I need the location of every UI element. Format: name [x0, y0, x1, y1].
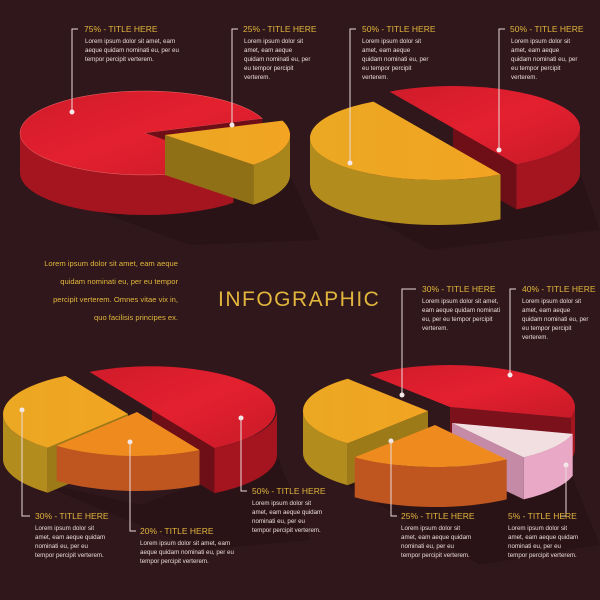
- callout: 40%: Lorem ipsum dolor sit: [522, 298, 581, 305]
- callout: 5%: nominati eu, per eu: [508, 543, 562, 550]
- callout: 40%: verterem.: [522, 334, 548, 341]
- callout: 25% bottom-right: Lorem ipsum dolor sit: [401, 525, 460, 532]
- callout: 25%: 25% - TITLE HERE: [243, 24, 317, 34]
- callout: 50% left: amet, eam aeque: [362, 47, 411, 54]
- callout: 75%: 75% - TITLE HERE: [84, 24, 158, 34]
- callout: 30% bottom-left: 30% - TITLE HERE: [35, 511, 109, 521]
- callout: 50% right: Lorem ipsum dolor sit: [511, 38, 570, 45]
- callout: 75%: Lorem ipsum dolor sit amet, eam: [85, 38, 175, 45]
- callout: 50% bottom-left: amet, eam aeque quidam: [252, 509, 322, 516]
- chart: bottom-left pie 30/20/50: [3, 366, 310, 550]
- chart: top-right pie 50/50: [310, 86, 600, 250]
- callout: 30% bottom-right: [400, 284, 500, 398]
- callout: 30% bottom-left: tempor percipit verterem.: [35, 552, 104, 559]
- title: INFOGRAPHIC: [218, 288, 380, 311]
- callout: 50% left: verterem.: [362, 74, 388, 81]
- intro text: percipit verterem. Omnes vitae vix in,: [53, 295, 178, 304]
- callout: 50% left: quidam nominati eu, per: [362, 56, 428, 63]
- callout: 25%: eu tempor percipit: [244, 65, 294, 72]
- callout: 25%: [230, 24, 317, 128]
- callout: 20%: 20% - TITLE HERE: [140, 526, 214, 536]
- callout: 30% bottom-left: nominati eu, per eu: [35, 543, 89, 550]
- callout: 30% bottom-left: Lorem ipsum dolor sit: [35, 525, 94, 532]
- callout: 50% left: eu tempor percipit: [362, 65, 412, 72]
- callout: 5%: Lorem ipsum dolor sit: [508, 525, 567, 532]
- callout: 5%: [508, 462, 578, 559]
- intro text: quidam nominati eu, per eu tempor: [60, 277, 178, 286]
- callout: 25% bottom-right: tempor percipit verterem.: [401, 552, 470, 559]
- callout: 30% bottom-right: eam aeque quidam nominati: [422, 307, 500, 314]
- callout: 20%: tempor percipit verterem.: [140, 558, 209, 565]
- callout: 25% bottom-right: nominati eu, per eu: [401, 543, 455, 550]
- callout: 50% left: Lorem ipsum dolor sit: [362, 38, 421, 45]
- callout: 30% bottom-right: Lorem ipsum dolor sit amet,: [422, 298, 499, 305]
- callout: 5%: amet, eam aeque quidam: [508, 534, 578, 541]
- callout: 30% bottom-right: eu, per eu tempor percipit: [422, 316, 493, 323]
- callout: 25%: quidam nominati eu, per: [244, 56, 310, 63]
- callout: 50% bottom-left: 50% - TITLE HERE: [252, 486, 326, 496]
- callout: 20%: Lorem ipsum dolor sit amet, eam: [140, 540, 230, 547]
- intro text: Lorem ipsum dolor sit amet, eam aeque: [44, 259, 178, 268]
- callout: 50% right: [496, 24, 584, 152]
- callout: 40%: quidam nominati eu, per: [522, 316, 588, 323]
- callout: 50% right: quidam nominati eu, per: [511, 56, 577, 63]
- callout: 40%: 40% - TITLE HERE: [522, 284, 596, 294]
- callout: 50% right: eu tempor percipit: [511, 65, 561, 72]
- callout: 20%: [128, 440, 234, 565]
- callout: 75%: aeque quidam nominati eu, per eu: [85, 47, 179, 54]
- callout: 40%: amet, eam aeque: [522, 307, 571, 314]
- callout: 20%: aeque quidam nominati eu, per eu: [140, 549, 234, 556]
- callout: 25%: amet, eam aeque: [244, 47, 293, 54]
- callout: 25% bottom-right: amet, eam aeque quidam: [401, 534, 471, 541]
- callout: 75%: tempor percipit verterem.: [85, 56, 154, 63]
- callout: 75%: [70, 24, 179, 114]
- callout: 50% bottom-left: tempor percipit verterem.: [252, 527, 321, 534]
- callout: 25% bottom-right: 25% - TITLE HERE: [401, 511, 475, 521]
- callout: 30% bottom-right: verterem.: [422, 325, 448, 332]
- callout: 25%: verterem.: [244, 74, 270, 81]
- intro text: [44, 259, 178, 322]
- callout: 50% left: [348, 24, 436, 166]
- chart: bottom-right pie 30/25/40/5: [303, 365, 600, 565]
- callout: 40%: eu tempor percipit: [522, 325, 572, 332]
- callout: 30% bottom-left: amet, eam aeque quidam: [35, 534, 105, 541]
- callout: 50% bottom-left: nominati eu, per eu: [252, 518, 306, 525]
- callout: 50% right: verterem.: [511, 74, 537, 81]
- intro text: quo facilisis principes ex.: [94, 313, 178, 322]
- callout: 50% right: amet, eam aeque: [511, 47, 560, 54]
- callout: 30% bottom-right: 30% - TITLE HERE: [422, 284, 496, 294]
- callout: 40%: [508, 284, 596, 378]
- callout: 50% bottom-left: [238, 416, 326, 534]
- callout: 25%: Lorem ipsum dolor sit: [244, 38, 303, 45]
- callout: 50% right: 50% - TITLE HERE: [510, 24, 584, 34]
- callout: 50% left: 50% - TITLE HERE: [362, 24, 436, 34]
- callout: 30% bottom-left: [20, 408, 109, 559]
- chart: top-left pie 75/25: [20, 91, 320, 245]
- callout: 5%: tempor percipit verterem.: [508, 552, 577, 559]
- callout: 50% bottom-left: Lorem ipsum dolor sit: [252, 500, 311, 507]
- callout: 25% bottom-right: [388, 438, 475, 559]
- callout: 5%: 5% - TITLE HERE: [508, 511, 577, 521]
